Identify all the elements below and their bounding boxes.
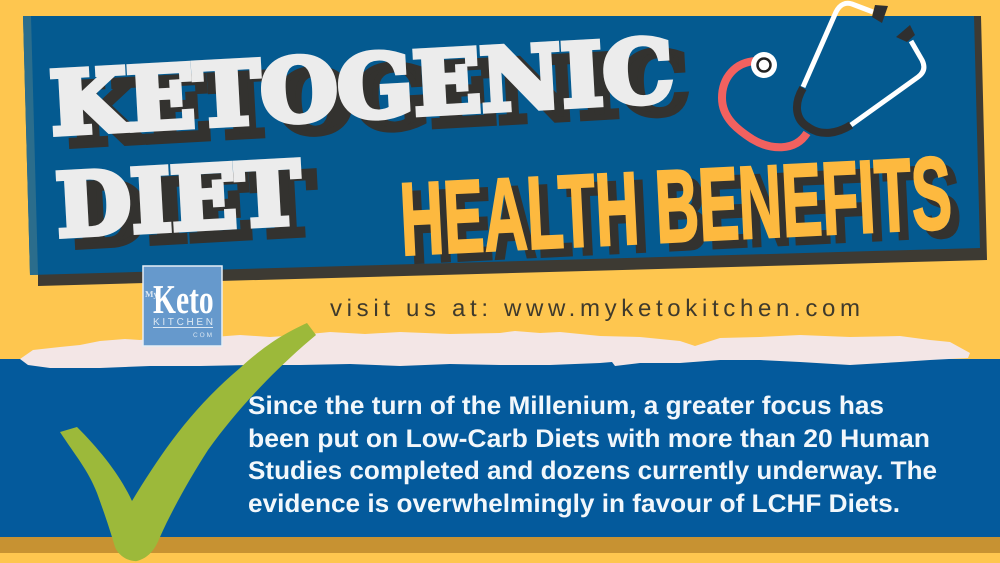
heading: DIET: DIET (54, 143, 303, 257)
website line: visit us at: www.myketokitchen.com (330, 295, 860, 322)
heading: KETOGENIC: KETOGENIC (48, 20, 676, 155)
text block: intro paragraph: Since the turn of the Millenium, a greater focus has (248, 392, 884, 420)
logo: My Keto Kitchen (143, 266, 222, 346)
text block: intro paragraph: been put on Low-Carb Diets with more than 20 Human (248, 425, 930, 453)
heading: HEALTH BENEFITS: HEALTH BENEFITS (397, 135, 954, 277)
text block: intro paragraph: evidence is overwhelmingly in favour of LCHF Diets. (248, 490, 900, 518)
logo: My Keto Kitchen: Keto (153, 276, 214, 322)
icon: green check mark (60, 323, 316, 561)
lower blue panel (0, 359, 1000, 537)
logo: My Keto Kitchen: KITCHEN (153, 317, 213, 328)
logo: My Keto Kitchen: My (145, 289, 158, 299)
text block: intro paragraph (248, 392, 937, 518)
heading: KETOGENIC: KETOGENIC (64, 32, 692, 167)
tan footer band (0, 537, 1000, 553)
text block: intro paragraph: Studies completed and dozens currently underway. The (248, 457, 937, 485)
panel: title banner (23, 16, 987, 286)
icon: stethoscope (722, 3, 924, 147)
heading: HEALTH BENEFITS: HEALTH BENEFITS (406, 143, 963, 285)
torn paper strip (20, 331, 970, 368)
logo: My Keto Kitchen: COM (193, 332, 212, 339)
heading: DIET: DIET (70, 154, 319, 268)
